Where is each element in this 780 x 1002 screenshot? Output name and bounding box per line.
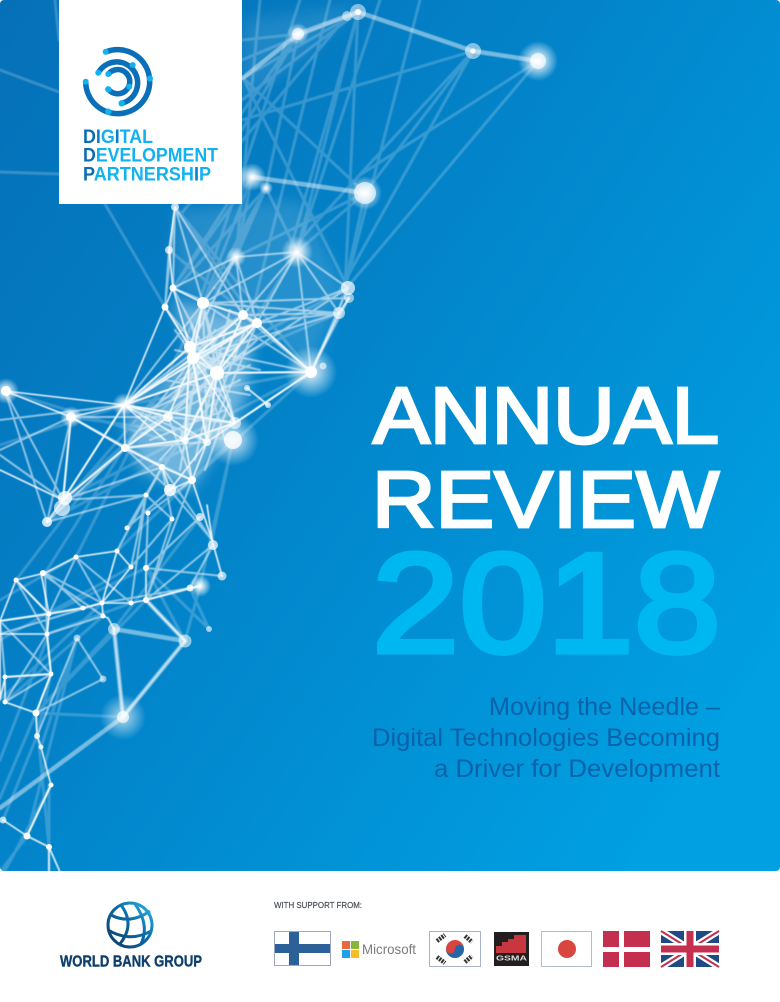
flag: United Kingdom — [661, 931, 719, 967]
logo panel — [59, 0, 242, 204]
icon: globe — [108, 903, 152, 947]
title: REVIEW — [372, 455, 720, 544]
title: 2018 — [372, 524, 721, 683]
network nodes and glows — [0, 4, 558, 850]
logo wordmark: PARTNERSHIP — [83, 164, 211, 186]
subtitle: Digital Technologies Becoming — [372, 724, 720, 752]
logo wordmark: DEVELOPMENT — [83, 144, 218, 166]
subtitle: Moving the Needle – — [489, 693, 720, 721]
subtitle — [372, 693, 720, 783]
title — [372, 371, 721, 683]
logo: GSMA — [494, 932, 529, 966]
logo: Microsoft: Microsoft — [362, 941, 416, 957]
logo: Microsoft — [342, 941, 416, 958]
World Bank Group logo — [60, 903, 202, 970]
World Bank Group wordmark: WORLD BANK GROUP — [60, 954, 202, 970]
title: ANNUAL — [373, 371, 719, 460]
network illustration — [0, 0, 538, 880]
logo: GSMA: GSMA — [496, 956, 527, 962]
subtitle: a Driver for Development — [434, 755, 720, 783]
icon: concentric ring logo — [83, 49, 153, 115]
flag: South Korea — [430, 932, 480, 966]
flag: Finland — [274, 932, 330, 966]
support label: WITH SUPPORT FROM: — [274, 900, 362, 910]
flag: Denmark — [603, 931, 650, 967]
flag: Japan — [542, 932, 592, 966]
logo wordmark — [83, 126, 218, 186]
logo wordmark: DIGITAL — [83, 126, 153, 148]
